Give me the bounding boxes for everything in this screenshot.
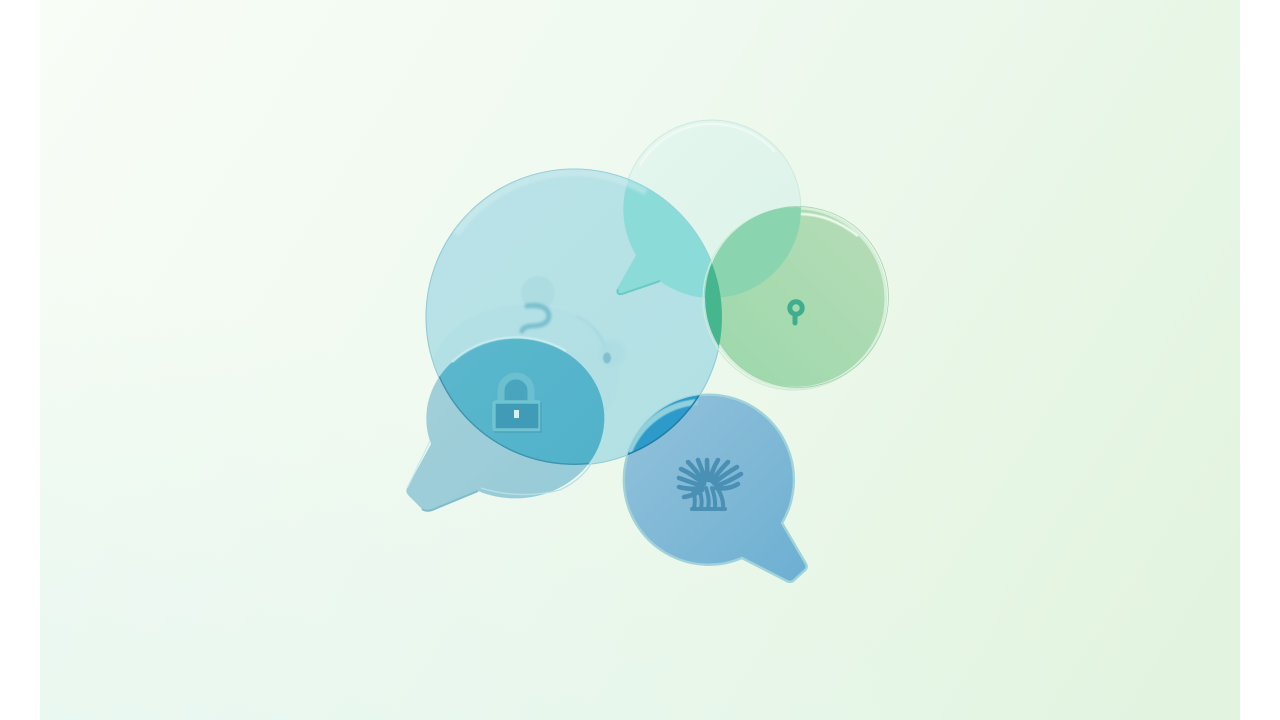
bubble: green circle (703, 206, 888, 390)
overlap: blue bubble over large circle (628, 395, 700, 456)
overlap: top bubble over large circle (454, 169, 712, 298)
overlap: large circle over green circle (705, 263, 722, 346)
icon: keyhole question mark (790, 302, 802, 323)
bubble: large central circle (426, 169, 722, 465)
bubble: faint halo with question mark (518, 276, 613, 364)
icon: padlock (494, 376, 541, 432)
bubble: lock speech bubble (406, 338, 604, 511)
bubble: blue speech bubble (624, 395, 807, 582)
icon: lion tree emblem (679, 460, 741, 509)
overlap: lock bubble over large circle (439, 336, 604, 465)
overlap: top bubble over green circle (705, 207, 801, 298)
bubble: pale top speech bubble (617, 120, 801, 298)
